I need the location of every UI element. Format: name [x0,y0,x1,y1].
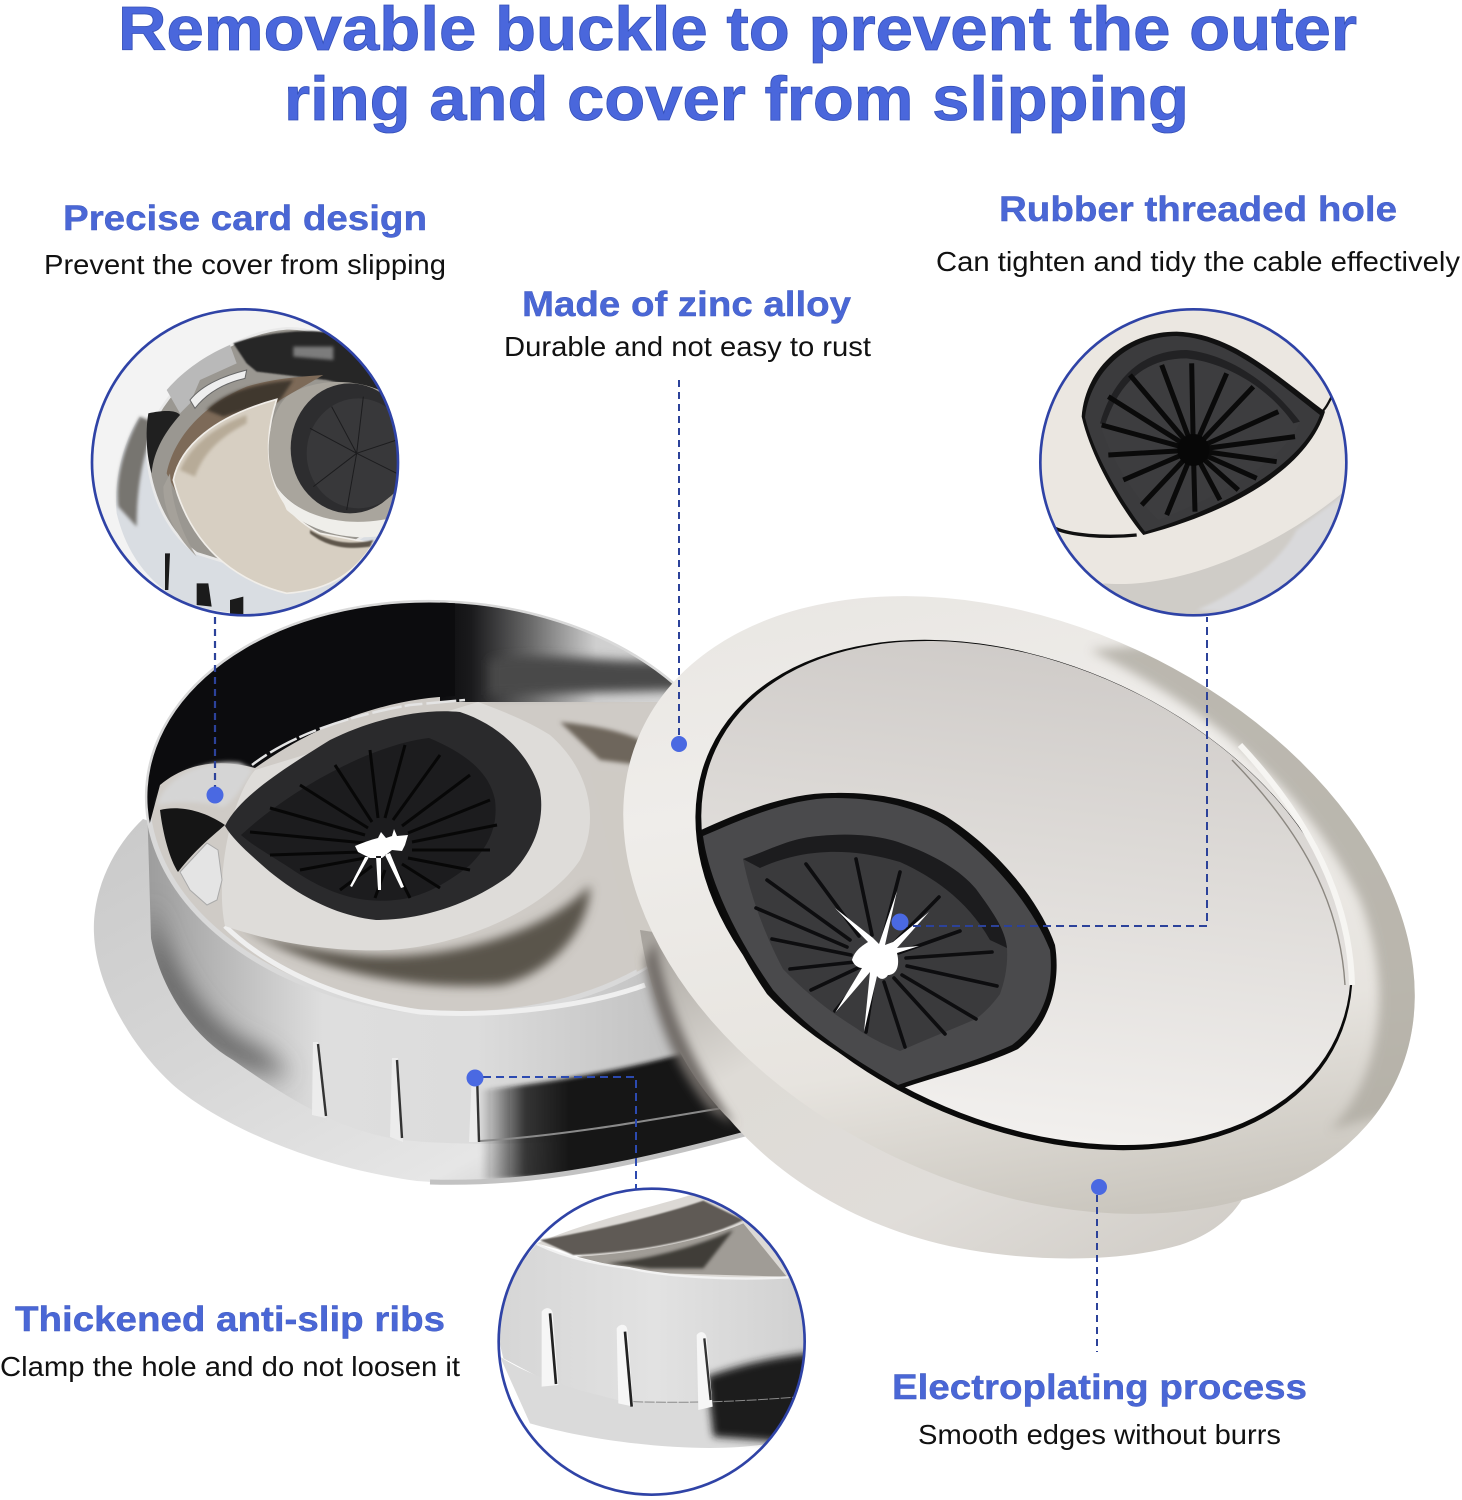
dark reflection [707,1352,820,1447]
rubber [290,383,388,514]
marker dot: rubber hole [892,914,908,930]
lower body [1103,494,1342,614]
dark interior wall [147,602,455,824]
detail circle: rubber threaded hole [1039,308,1348,617]
marker dot: zinc alloy [671,736,687,752]
callout: precise card design: Precise card design [63,199,427,238]
callout: made of zinc alloy [504,285,871,362]
dashed leader: rubber threaded hole [900,617,1207,926]
callout: precise card design: Prevent the cover from slipping [44,249,446,280]
ring right tan band [1090,640,1440,1130]
callout: rubber threaded hole [936,190,1460,277]
rubber insert [225,700,541,920]
rubber spokes [250,745,497,898]
rim lower edge [225,926,645,1013]
detail circle: thickened anti-slip ribs [490,1180,820,1500]
lower body [640,930,1245,1258]
ledge [167,375,323,500]
flange [94,819,760,1183]
callout: electroplating process [892,1368,1307,1450]
title [118,0,1357,134]
base reflections [560,722,645,765]
marker dot: electroplating [1091,1179,1107,1195]
dark chrome reflection [480,1053,742,1179]
callout: thickened anti-slip ribs [0,1300,460,1382]
marker dot: ribs [466,1070,484,1086]
wall [500,1244,804,1402]
circle border [499,1189,805,1495]
rim interior [146,327,363,562]
rib marks [312,1042,480,1142]
circle border [92,309,398,615]
rubber inner recess [241,738,496,901]
detail circle: precise card design [90,308,400,617]
callout: rubber threaded hole: Rubber threaded hole [999,190,1397,229]
marker dot: card design [206,786,224,804]
rubber outer shell [701,793,1057,1089]
circle border [1040,309,1346,615]
tan base [173,399,373,593]
lid [620,542,1432,1244]
rubber insert [701,793,1057,1089]
left grommet: open base with rubber insert [94,583,760,1183]
highlight edge of rubber [252,700,465,765]
callout: made of zinc alloy: Durable and not easy to rust [504,331,871,362]
outer ring [524,476,1462,1334]
rubber spokes [756,859,997,1047]
callout: electroplating process: Smooth edges without burrs [918,1419,1281,1450]
body shadow at left [645,940,735,1125]
lid gap [1055,528,1137,536]
rubber recess [1100,350,1300,520]
reflection at buckle [158,762,253,807]
white slit star [835,891,929,1032]
chrome tab [180,843,222,905]
dashed leader: precise card design [214,617,216,787]
lid gap shadow [613,540,1435,1250]
silver collar around rubber [222,702,590,950]
right grommet: closed cover [623,596,1415,1258]
callout: thickened anti-slip ribs: Clamp the hole and do not loosen it [0,1351,460,1382]
lid edge highlight right [1240,745,1352,985]
dashed leader: thickened ribs [483,1077,636,1189]
title: ring and cover from slipping [284,65,1189,134]
rubber inner recess [743,835,1007,1051]
dashed leader: electroplating [1096,1195,1098,1352]
top right reflection band [440,602,665,702]
cylinder wall [148,826,677,1144]
callout: made of zinc alloy: Made of zinc alloy [522,285,852,324]
outer wall [116,417,380,620]
callout: electroplating process: Electroplating process [892,1368,1307,1407]
rubber outer shell [225,711,541,920]
flange bottom rim [430,1134,745,1182]
callout: precise card design [44,199,446,280]
callout: rubber threaded hole: Can tighten and tidy the cable effectively [936,246,1460,277]
inner surfaces [538,1195,789,1278]
flange [500,1357,768,1448]
dashed leader: made of zinc alloy [678,380,680,736]
lower left dark notch [160,808,225,872]
rubber shell [1082,332,1325,535]
ribs [542,1308,558,1387]
cup interior [133,583,757,1033]
silver collar [269,382,397,530]
callout: thickened anti-slip ribs: Thickened anti-slip ribs [15,1300,445,1339]
white slit star [350,829,408,890]
